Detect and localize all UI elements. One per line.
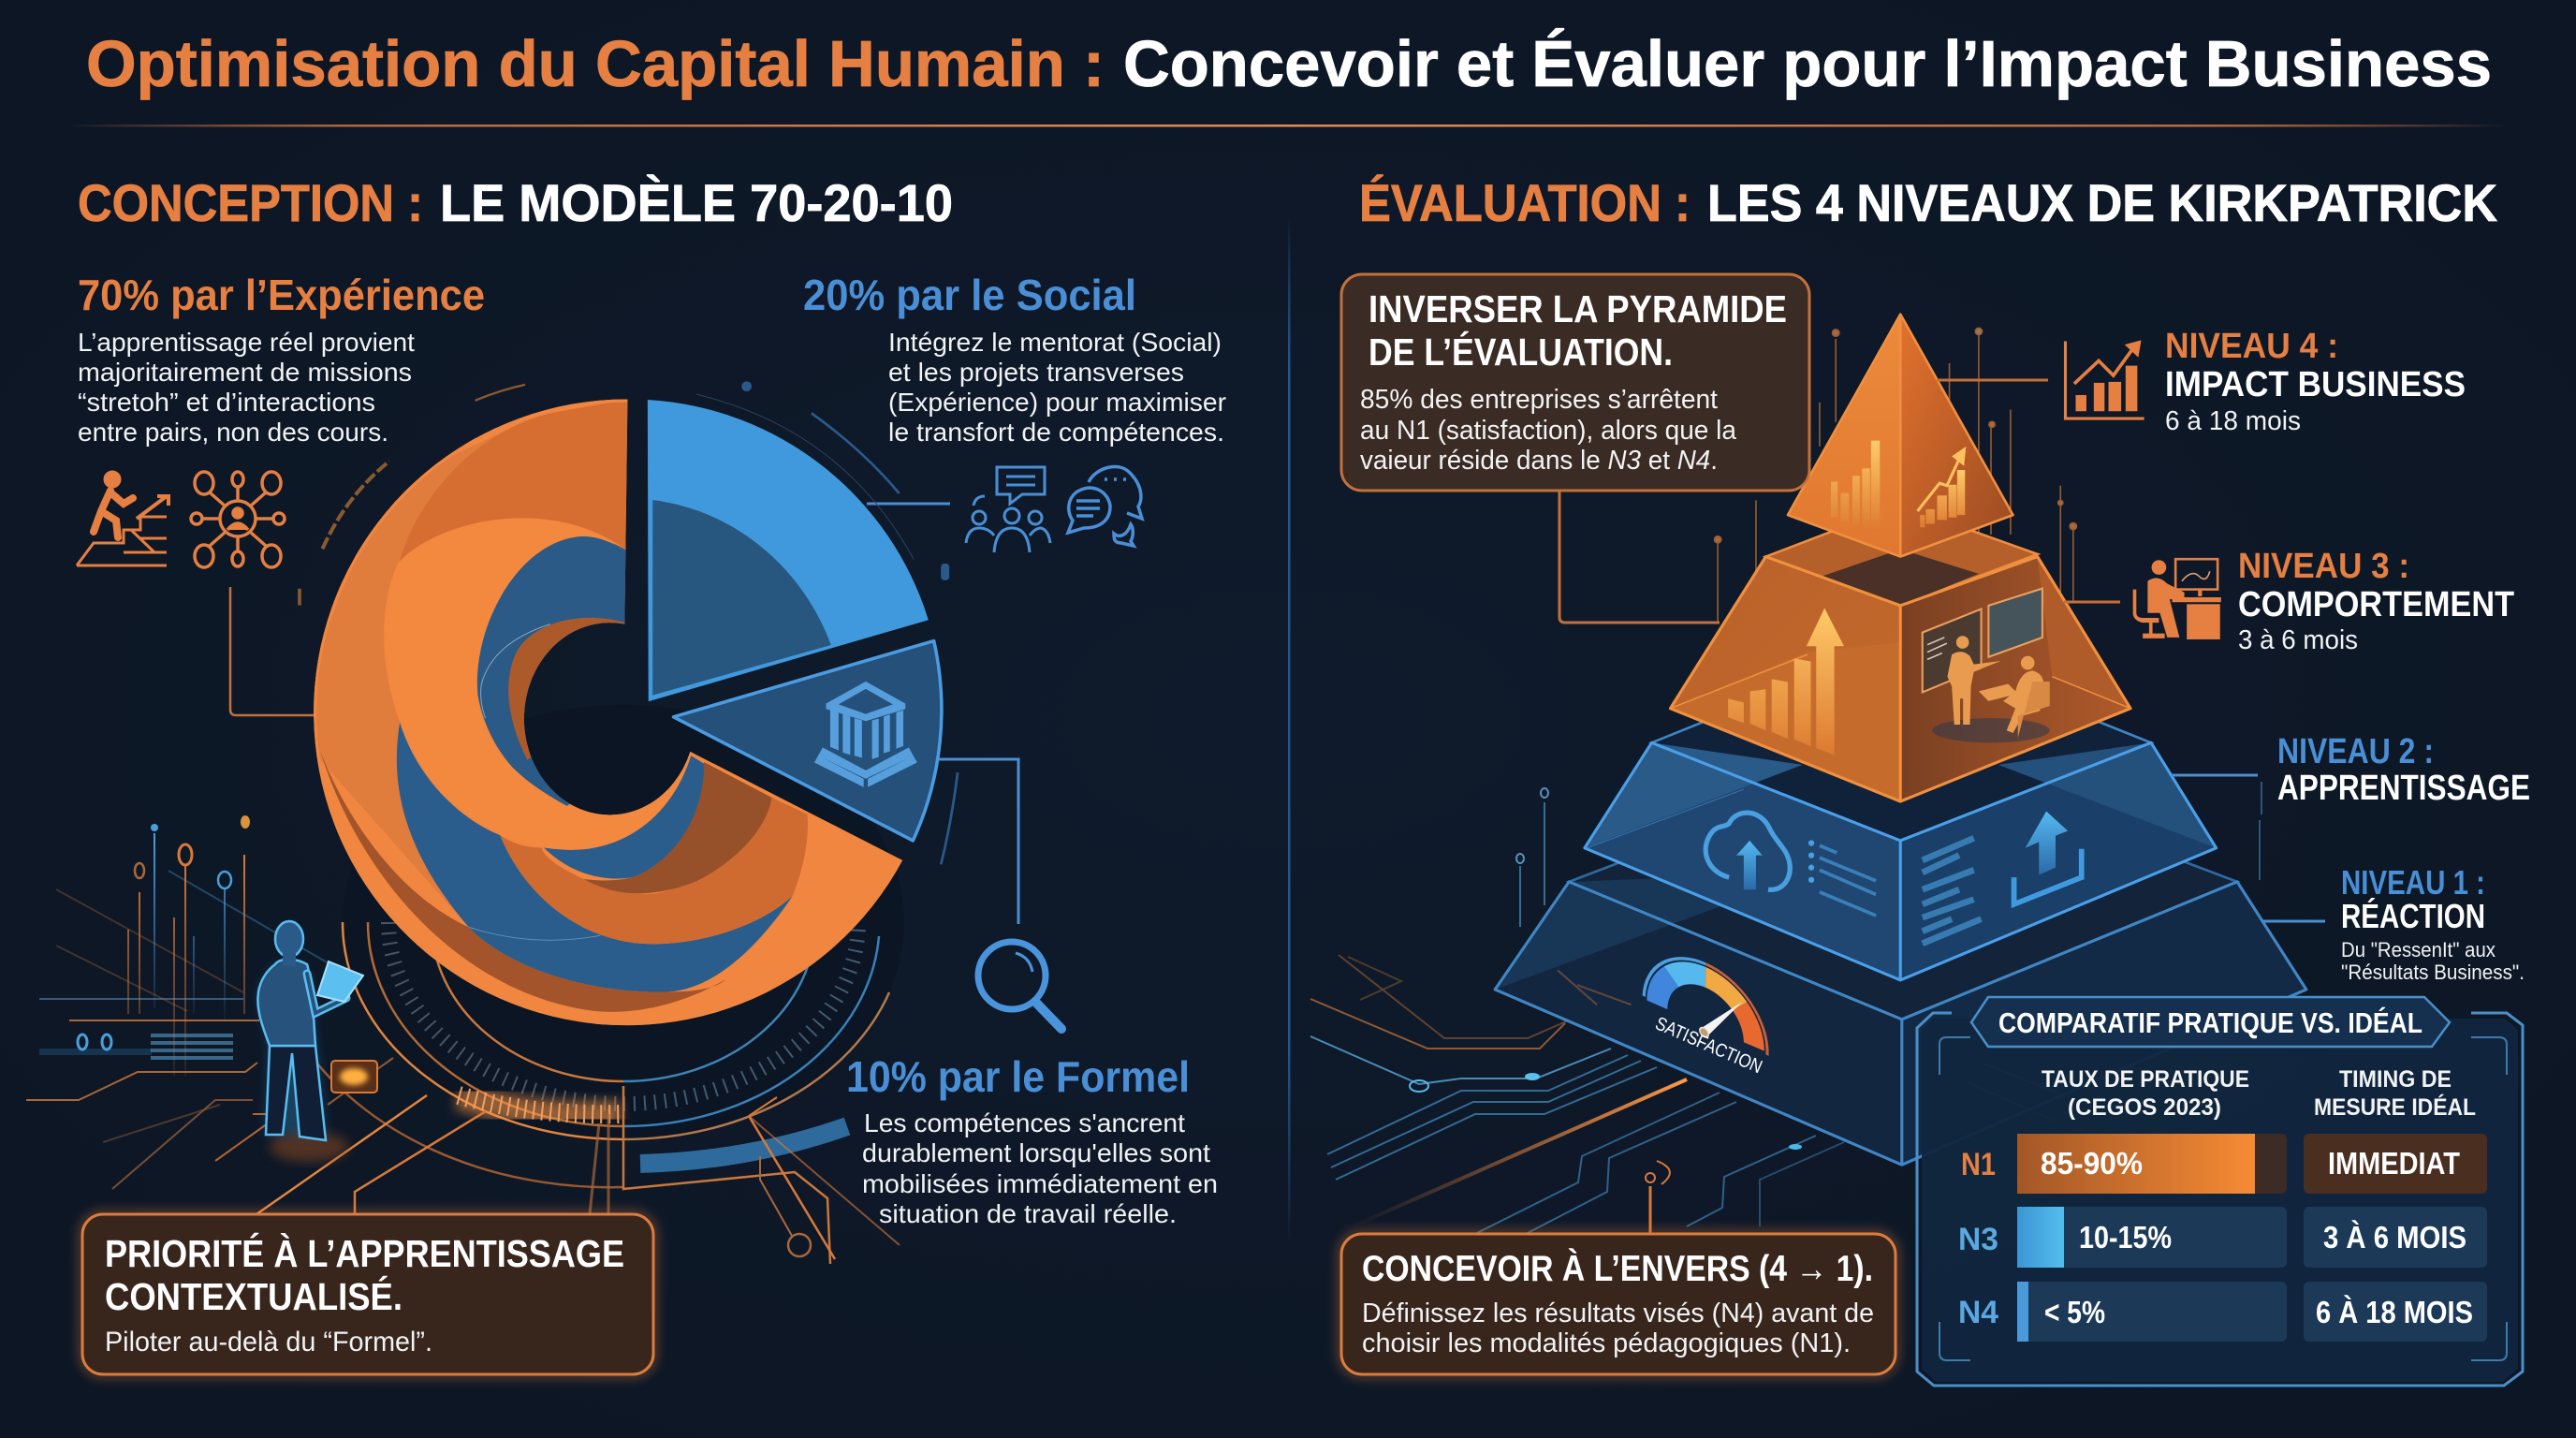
text: 20% par le Social: Intégrez le mentorat (Social) — [888, 328, 1222, 357]
pyramid — [1495, 315, 2306, 1165]
text: 10% par le Formel: durablement lorsqu'elles sont — [862, 1138, 1210, 1167]
row N4 — [1958, 1282, 2487, 1342]
heading: evaluation: ÉVALUATION : — [1359, 173, 1690, 232]
heading: conception: LE MODÈLE 70-20-10 — [440, 173, 953, 232]
slice: 70% experience — [314, 399, 902, 1026]
pie decorations — [300, 381, 958, 864]
icon: bars — [1831, 441, 1880, 531]
left circuit lines — [26, 833, 346, 1189]
text: 70% par l'Expérience: 70% par l’Expérience — [78, 271, 485, 319]
text: 20% par le Social: et les projets transverses — [888, 358, 1184, 387]
callout: inverser la pyramide: 85% des entreprises s’arrêtent — [1360, 385, 1718, 415]
level 2 block — [1585, 642, 2217, 980]
callout: inverser la pyramide: vaieur réside dans le N3 et N4. — [1360, 446, 1718, 476]
icon: list lines — [1808, 838, 1982, 944]
label: niveau 1: Du "RessenIt" aux — [2341, 938, 2496, 961]
glowing block — [331, 1061, 377, 1093]
callout: inverser la pyramide — [1341, 274, 1809, 491]
text: 70% par l'Expérience — [78, 271, 485, 447]
connectors right — [1559, 380, 2325, 921]
panel title — [1971, 997, 2450, 1047]
icon: rising bars — [1728, 608, 1844, 755]
text: 10% par le Formel: 10% par le Formel — [846, 1052, 1190, 1101]
callout: concevoir à l'envers: CONCEVOIR À L’ENVERS (4 → 1). — [1362, 1248, 1873, 1289]
level 4 block — [1788, 315, 2013, 557]
panel: comparatif pratique vs idéal — [1917, 997, 2523, 1386]
text: 20% par le Social: le transfort de compétences. — [888, 418, 1224, 447]
text: 20% par le Social: (Expérience) pour maximiser — [888, 388, 1226, 417]
text: 70% par l'Expérience: majoritairement de missions — [78, 358, 412, 387]
slice: 20% social — [648, 400, 929, 701]
heading: evaluation — [1359, 173, 2497, 232]
icon: person at desk — [2133, 559, 2221, 639]
text: 20% par le Social — [803, 271, 1226, 447]
text: 70% par l'Expérience: entre pairs, non des cours. — [78, 418, 388, 447]
label: niveau 4: 6 à 18 mois — [2165, 406, 2301, 436]
icon: cloud upload — [1705, 813, 1790, 889]
row N4: < 5% — [2044, 1295, 2105, 1329]
chart: 70-20-10 pie — [300, 384, 942, 1039]
row N1: N1 — [1961, 1147, 1996, 1182]
label: niveau 3: NIVEAU 3 : — [2238, 547, 2409, 586]
column headers — [2042, 1066, 2476, 1121]
icon: network — [191, 472, 285, 567]
icon: magnifier — [978, 942, 1061, 1029]
callout: inverser la pyramide: au N1 (satisfaction), alors que la — [1360, 416, 1737, 446]
text: 70% par l'Expérience: “stretoh” et d’interactions — [78, 388, 375, 417]
title — [86, 27, 2492, 100]
label: niveau 3 — [2238, 547, 2514, 655]
row N3: 3 À 6 MOIS — [2323, 1220, 2466, 1255]
label: niveau 1: "Résultats Business". — [2341, 961, 2525, 984]
label: niveau 1: NIVEAU 1 : — [2341, 863, 2485, 902]
callout: priorité — [82, 1214, 653, 1374]
row N4: N4 — [1958, 1295, 1998, 1330]
callout: concevoir à l'envers — [1341, 1234, 1895, 1374]
column headers: MESURE IDÉAL — [2314, 1093, 2476, 1121]
title: Optimisation du Capital Humain : — [86, 27, 1105, 100]
label: niveau 3: 3 à 6 mois — [2238, 625, 2358, 655]
icon: temple — [814, 682, 917, 787]
connectors left — [230, 504, 1018, 924]
label: niveau 4: NIVEAU 4 : — [2165, 327, 2338, 366]
icon: meeting — [1923, 589, 2050, 742]
row N4: 6 À 18 MOIS — [2316, 1295, 2473, 1329]
callout: concevoir à l'envers: Définissez les résultats visés (N4) avant de — [1362, 1299, 1874, 1328]
label: niveau 2 — [2277, 732, 2530, 808]
row N3: N3 — [1958, 1222, 1998, 1257]
callout: inverser la pyramide: INVERSER LA PYRAMIDE — [1368, 287, 1787, 330]
text: SATISFACTION gauge label: SATISFACTION — [1652, 1013, 1765, 1078]
text: 70% par l'Expérience: L’apprentissage réel provient — [78, 328, 415, 357]
person with tablet — [257, 921, 363, 1162]
callout: priorité: PRIORITÉ À L’APPRENTISSAGE — [105, 1232, 624, 1275]
column headers: TAUX DE PRATIQUE — [2042, 1066, 2249, 1093]
level 1 block — [1495, 755, 2306, 1165]
heading: conception: CONCEPTION : — [78, 173, 423, 232]
label: niveau 4: IMPACT BUSINESS — [2165, 365, 2466, 404]
callout: priorité: CONTEXTUALISÉ. — [105, 1275, 402, 1318]
heading: evaluation: LES 4 NIVEAUX DE KIRKPATRICK — [1707, 173, 2497, 232]
row N3 — [1958, 1207, 2487, 1268]
label: niveau 4 — [2165, 327, 2466, 436]
label: niveau 1 — [2341, 863, 2525, 984]
decorative pins — [1715, 328, 2077, 623]
callout: priorité: Piloter au-delà du “Formel”. — [105, 1327, 432, 1357]
icon: speech bubbles — [1068, 466, 1142, 546]
row N1 — [1961, 1134, 2487, 1194]
text: 10% par le Formel: Les compétences s'ancrent — [864, 1108, 1185, 1137]
icon: satisfaction gauge — [1644, 937, 1767, 1064]
icon: mentoring group — [966, 467, 1050, 552]
text: 10% par le Formel: mobilisées immédiatement en — [862, 1169, 1218, 1198]
row N1: 85-90% — [2041, 1146, 2143, 1181]
level 3 block — [1670, 506, 2130, 801]
label: niveau 1: RÉACTION — [2341, 897, 2485, 935]
label: niveau 3: COMPORTEMENT — [2238, 585, 2514, 624]
icon: growth — [1918, 447, 1966, 527]
icon: climbing person — [77, 472, 168, 565]
orbit arcs — [300, 922, 889, 1187]
decorative tech background right — [1310, 788, 1844, 1234]
slice: 10% formel — [674, 641, 942, 841]
icon: impact chart — [2065, 340, 2144, 418]
label: niveau 2: APPRENTISSAGE — [2277, 769, 2530, 808]
decorative tech background left — [26, 705, 904, 1264]
text: 10% par le Formel: situation de travail réelle. — [879, 1199, 1177, 1228]
label: niveau 2: NIVEAU 2 : — [2277, 732, 2434, 771]
heading: conception — [78, 173, 953, 232]
panel title: COMPARATIF PRATIQUE VS. IDÉAL — [1998, 1006, 2422, 1039]
title: Concevoir et Évaluer pour l’Impact Business — [1123, 27, 2492, 100]
row N3: 10-15% — [2079, 1220, 2172, 1255]
column headers: (CEGOS 2023) — [2068, 1094, 2221, 1121]
callout: inverser la pyramide: DE L’ÉVALUATION. — [1368, 330, 1673, 374]
row N1: IMMEDIAT — [2328, 1146, 2460, 1181]
callout: concevoir à l'envers: choisir les modalités pédagogiques (N1). — [1362, 1328, 1851, 1358]
text: 10% par le Formel — [846, 1052, 1218, 1228]
column headers: TIMING DE — [2339, 1066, 2452, 1093]
icon: upload arrow — [2014, 812, 2082, 904]
text: 20% par le Social: 20% par le Social — [803, 271, 1136, 319]
